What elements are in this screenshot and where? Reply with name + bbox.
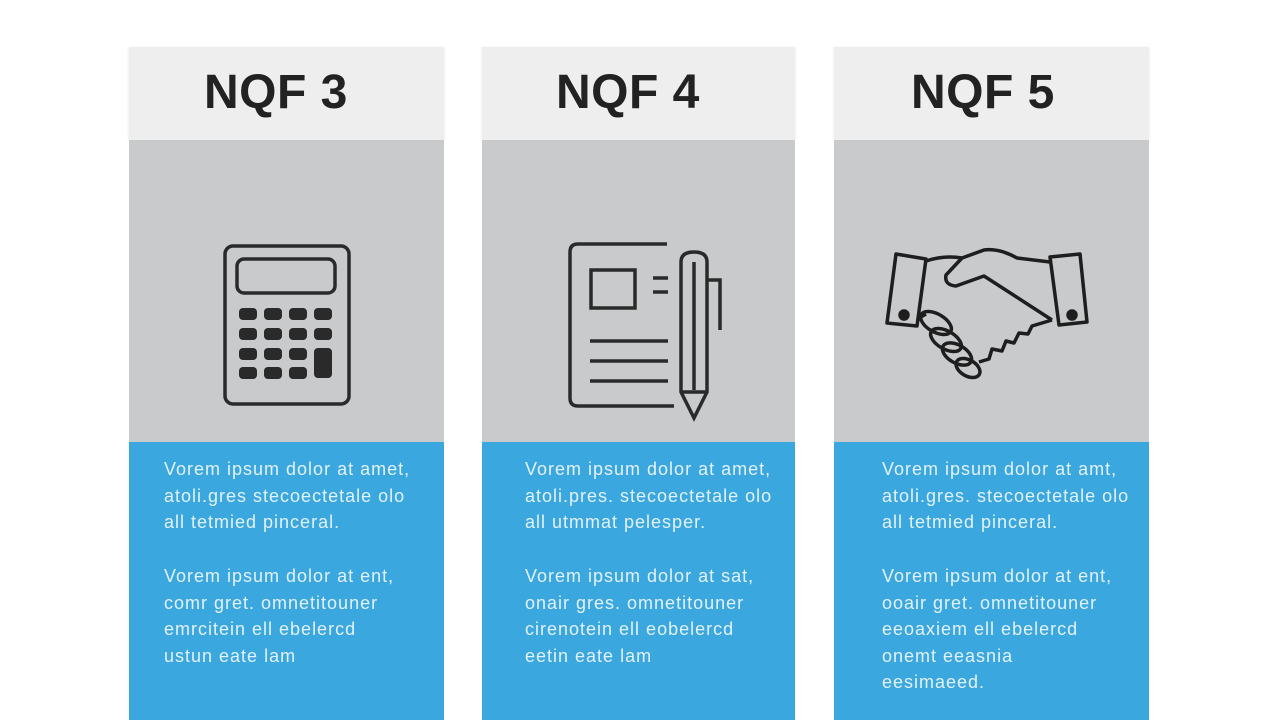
heading: NQF 4 — [482, 47, 795, 140]
text block: ooair gret. omnetitouner — [882, 592, 1097, 612]
heading: NQF 3 — [129, 47, 444, 140]
text block: all tetmied pinceral. — [882, 512, 1058, 532]
text block: cirenotein ell eobelercd — [525, 619, 734, 639]
text block: all tetmied pinceral. — [164, 512, 340, 532]
text block: onair gres. omnetitouner — [525, 592, 744, 612]
text block: Vorem ipsum dolor at amet, — [164, 459, 410, 479]
text block — [482, 442, 795, 720]
panel: NQF 5 — [834, 47, 1150, 720]
text block: eesimaeed. — [882, 672, 985, 692]
heading: NQF 5 — [834, 47, 1149, 140]
text block: Vorem ipsum dolor at ent, — [164, 566, 394, 586]
panel: NQF 4 — [482, 47, 796, 720]
text block: Vorem ipsum dolor at ent, — [882, 566, 1112, 586]
icon panel: document and pencil — [482, 140, 795, 442]
heading: NQF 5: NQF 5 — [911, 66, 1055, 119]
text block: all utmmat pelesper. — [525, 512, 706, 532]
text block: onemt eeasnia — [882, 646, 1013, 666]
icon panel: handshake — [834, 140, 1149, 442]
text block: eetin eate lam — [525, 646, 652, 666]
text block: atoli.gres. stecoectetale olo — [882, 486, 1129, 506]
text block: Vorem ipsum dolor at amt, — [882, 459, 1117, 479]
text block: Vorem ipsum dolor at sat, — [525, 566, 754, 586]
panel: NQF 3 — [128, 47, 444, 720]
text block: emrcitein ell ebelercd — [164, 619, 356, 639]
text block: eeoaxiem ell ebelercd — [882, 619, 1078, 639]
text block: atoli.pres. stecoectetale olo — [525, 486, 772, 506]
text block: ustun eate lam — [164, 646, 296, 666]
icon panel: calculator — [129, 140, 444, 442]
text block: comr gret. omnetitouner — [164, 592, 378, 612]
text block: Vorem ipsum dolor at amet, — [525, 459, 771, 479]
text block: atoli.gres stecoectetale olo — [164, 486, 405, 506]
heading: NQF 3: NQF 3 — [204, 66, 348, 119]
text block — [129, 442, 444, 720]
text block — [834, 442, 1149, 720]
heading: NQF 4: NQF 4 — [556, 66, 700, 119]
